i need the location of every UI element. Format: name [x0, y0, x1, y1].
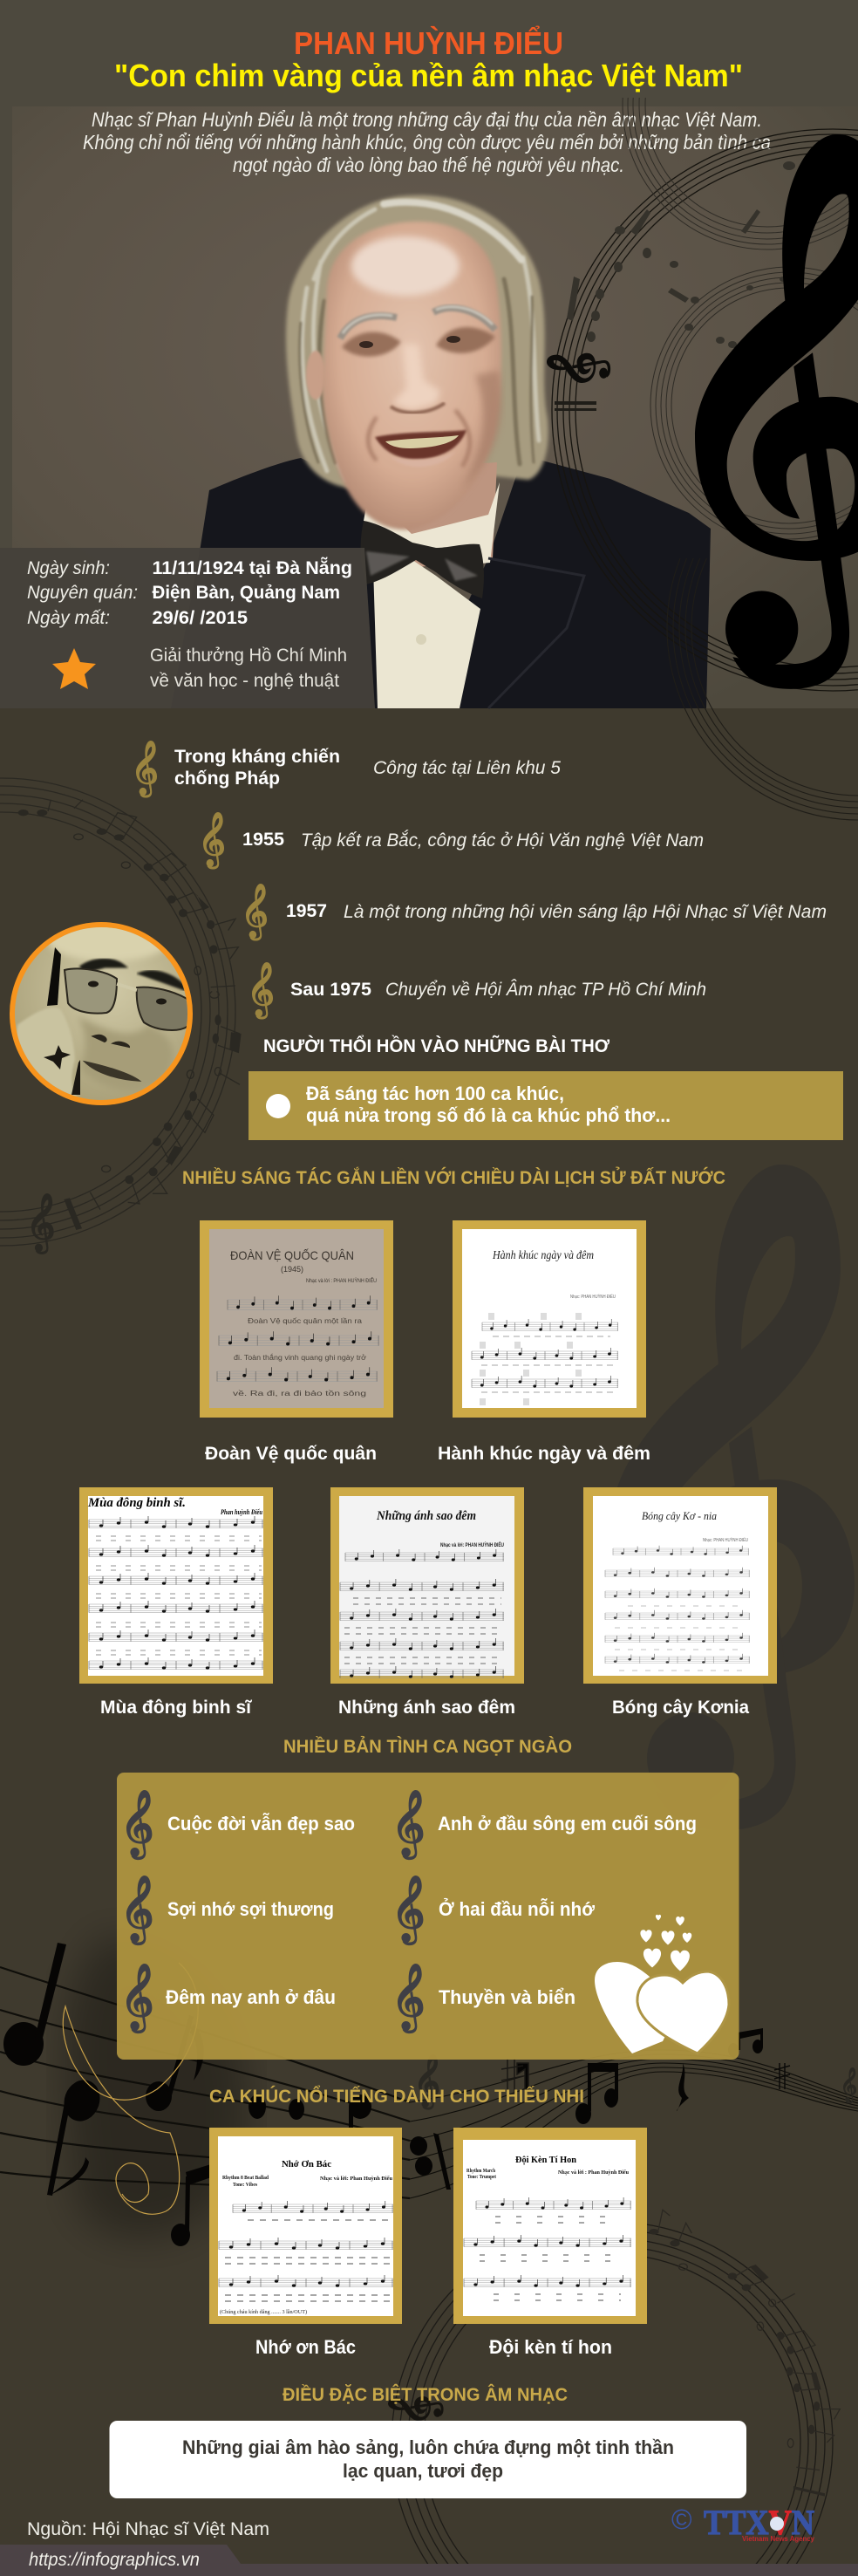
birth row	[27, 557, 352, 578]
description: Tập kết ra Bắc, công tác ở Hội Văn nghệ Việt Nam	[301, 830, 704, 851]
sheet author: Nhạc và lời : PHAN HUỲNH ĐIỂU	[306, 1278, 377, 1284]
lyrics: về. Ra đi, ra đi bảo tồn sông	[233, 1390, 366, 1397]
knuckle creases	[44, 1045, 71, 1069]
left brow	[81, 960, 125, 972]
label: Những ánh sao đêm: Những ánh sao đêm	[338, 1698, 515, 1718]
wavy music staff	[0, 1967, 858, 2198]
teeth	[385, 435, 459, 448]
hometown row	[27, 583, 340, 603]
card frame	[209, 2128, 402, 2324]
icon: clef row 2 left	[126, 1876, 152, 1945]
intro paragraph	[83, 108, 771, 176]
song: Thuyền và biển: Thuyền và biển	[439, 1986, 575, 2008]
label: Đội kèn tí hon: Đội kèn tí hon	[489, 2336, 612, 2358]
icon: clef row 3 left	[126, 1964, 152, 2033]
decorative stave ring bottom right	[392, 2222, 833, 2576]
shirt button	[416, 634, 426, 645]
card frame	[453, 2128, 647, 2324]
label: Bóng cây Kơnia: Bóng cây Kơnia	[612, 1698, 749, 1718]
sheet paper	[593, 1496, 768, 1676]
panel background	[0, 548, 375, 708]
sheet title: Đội Kèn Tí Hon	[515, 2155, 576, 2165]
sheet paper	[218, 2136, 393, 2316]
portrait photograph	[171, 195, 711, 708]
orange ring	[10, 922, 193, 1105]
card frame	[583, 1487, 777, 1684]
sheet rhythm	[222, 2176, 393, 2188]
panel text	[306, 1083, 671, 1126]
sheet rhythm: Rhythm 8 Beat Ballad	[222, 2176, 269, 2181]
timeline item: after 1975	[252, 962, 706, 1019]
shirt	[373, 558, 480, 708]
hometown row: Nguyên quán:	[27, 583, 138, 603]
birth row: 11/11/1924 tại Đà Nẵng	[152, 557, 352, 578]
agency mark: TTXVN	[704, 2503, 814, 2542]
right eye	[446, 336, 460, 343]
sheet paper	[462, 1229, 637, 1408]
stave ring notes left	[18, 800, 242, 1230]
heading: poetry: NGƯỜI THỔI HỒN VÀO NHỮNG BÀI THƠ	[263, 1035, 609, 1056]
sheet title: Những ánh sao đêm	[376, 1509, 476, 1523]
forehead light	[47, 927, 163, 961]
period: Trong kháng chiến	[174, 747, 340, 767]
callout text: Những giai âm hào sảng, luôn chứa đựng một tinh thần	[182, 2436, 674, 2458]
sheet title: ĐOÀN VỆ QUỐC QUÂN	[230, 1247, 354, 1262]
mouth	[85, 1062, 140, 1081]
footer strip	[0, 2545, 858, 2576]
award text: Giải thưởng Hồ Chí Minh	[150, 646, 347, 666]
eyes	[88, 981, 99, 987]
sheet title: Hành khúc ngày và đêm	[492, 1249, 594, 1262]
title subtitle: "Con chim vàng của nền âm nhạc Việt Nam"	[114, 58, 743, 93]
eyes	[359, 341, 373, 348]
nose underside	[391, 403, 445, 413]
staves and lyrics	[464, 2197, 631, 2300]
jacket	[171, 455, 711, 708]
intro paragraph: Không chỉ nổi tiếng với những hành khúc, ông còn được yêu mến bởi những bản tình ca	[83, 131, 771, 154]
label: Mùa đông binh sĩ: Mùa đông binh sĩ	[100, 1698, 252, 1718]
sheet title: Bóng cây Kơ - nia	[642, 1509, 717, 1522]
sheet author: Phan huỳnh Điểu	[221, 1508, 262, 1516]
birth row: Ngày sinh:	[27, 558, 110, 578]
decorative music staves on photo	[551, 98, 858, 692]
description: Công tác tại Liên khu 5	[373, 758, 561, 778]
sheet card: Đội kèn tí hon	[453, 2128, 647, 2324]
sheet author: Nhạc: PHAN HUỲNH ĐIỂU	[703, 1537, 748, 1543]
label: Nhớ ơn Bác: Nhớ ơn Bác	[255, 2336, 356, 2358]
song: Đêm nay anh ở đâu: Đêm nay anh ở đâu	[166, 1986, 336, 2008]
callout text: lạc quan, tươi đẹp	[343, 2460, 503, 2482]
sheet author: Nhạc: PHAN HUỲNH ĐIỂU	[570, 1294, 616, 1300]
right lens	[137, 987, 188, 1030]
icon: gold clef	[203, 812, 224, 869]
icon: gold clef	[252, 962, 273, 1019]
bow tie	[361, 521, 484, 598]
icon: star	[52, 648, 96, 689]
award text	[150, 646, 347, 691]
circular portrait	[10, 919, 193, 1105]
left lens	[65, 968, 117, 1014]
icon: gold clef	[246, 884, 267, 940]
icon: clef row 2 right	[398, 1876, 423, 1945]
card frame	[79, 1487, 273, 1684]
sepia photo base	[15, 927, 187, 1100]
label: Hành khúc ngày và đêm: Hành khúc ngày và đêm	[438, 1444, 650, 1464]
icon: clef row 1 left	[126, 1790, 152, 1860]
panel fill	[117, 1773, 739, 2060]
box fill	[110, 2421, 746, 2498]
faint large background clef	[610, 1165, 855, 1830]
icon: clef row 3 right	[398, 1964, 423, 2033]
staves	[217, 1295, 379, 1382]
eye sockets	[342, 327, 495, 357]
lower ring under header	[666, 558, 858, 820]
sheet rhythm: Nhạc và lời : Phan Huỳnh Điểu	[558, 2169, 630, 2176]
gold outline clef	[63, 1963, 198, 2214]
callout text	[182, 2436, 674, 2482]
description: Chuyển về Hội Âm nhạc TP Hồ Chí Minh	[385, 980, 706, 1000]
right brow	[141, 972, 186, 989]
hair	[286, 195, 548, 489]
staves and lyrics	[340, 1549, 504, 1678]
jacket lapel line	[488, 558, 584, 708]
horizontal clef at bottom	[388, 2396, 444, 2421]
lower lip	[391, 452, 455, 467]
collar	[364, 482, 500, 567]
smile lines	[368, 410, 470, 467]
bow tie highlight	[366, 551, 478, 581]
large black treble clef	[695, 134, 858, 689]
heading: special in music: ĐIỀU ĐẶC BIỆT TRONG ÂM NHẠC	[283, 2384, 568, 2405]
panel text: quá nửa trong số đó là ca khúc phổ thơ...	[306, 1104, 671, 1126]
agency tagline: Vietnam News Agency	[742, 2535, 815, 2543]
neck	[366, 462, 497, 567]
death row: 29/6/ /2015	[152, 608, 248, 628]
icon: clef row 1 right	[398, 1790, 423, 1860]
timeline item: 1955	[203, 812, 704, 869]
black music notes	[3, 1943, 790, 2246]
hometown row: Điện Bàn, Quảng Nam	[152, 583, 340, 603]
card frame	[200, 1220, 393, 1418]
description: Là một trong những hội viên sáng lập Hội Nhạc sĩ Việt Nam	[344, 902, 827, 922]
decorative stave ring left	[0, 778, 235, 1246]
small horizontal clef	[547, 353, 610, 383]
sheet author: Nhạc và lời: PHAN HUỲNH ĐIỂU	[440, 1542, 504, 1548]
stave ring notes bottom right	[649, 2210, 840, 2497]
sheet card: Hành khúc ngày và đêm	[453, 1220, 646, 1418]
bullet dot	[266, 1094, 290, 1118]
wavy staff shadow	[65, 1937, 249, 2238]
heading: history songs: NHIỀU SÁNG TÁC GẮN LIỀN VỚI CHIỀU DÀI LỊCH SỬ ĐẤT NƯỚC	[182, 1167, 725, 1188]
label: Đoàn Vệ quốc quân: Đoàn Vệ quốc quân	[205, 1444, 377, 1464]
panel fill	[249, 1071, 843, 1140]
sheet paper	[339, 1496, 514, 1676]
sheet rhythm: Tone: Trumpet	[467, 2175, 496, 2180]
sheet paper	[209, 1229, 384, 1408]
hand	[13, 1008, 78, 1099]
lyrics	[233, 1317, 367, 1397]
glasses bridge	[117, 984, 137, 990]
ear	[306, 351, 325, 400]
small clef on left stave	[31, 1193, 54, 1254]
card frame	[330, 1487, 524, 1684]
staves and lyrics	[605, 1546, 750, 1671]
source line: Nguồn: Hội Nhạc sĩ Việt Nam	[27, 2519, 269, 2539]
sheet card: Bóng cây Kơnia	[583, 1487, 777, 1684]
year: Sau 1975	[290, 980, 371, 1000]
sheet paper	[463, 2140, 636, 2316]
death row	[27, 608, 248, 628]
year: 1955	[242, 830, 284, 850]
intro paragraph: ngọt ngào đi vào lòng bao thế hệ người yêu nhạc.	[233, 154, 624, 176]
personal info panel	[0, 548, 375, 708]
panel text: Đã sáng tác hơn 100 ca khúc,	[306, 1083, 564, 1104]
panel: love songs	[117, 1773, 739, 2060]
sheet rhythm	[466, 2169, 630, 2180]
callout box	[110, 2421, 746, 2498]
lyrics: Đoàn Vệ quốc quân một lần ra	[248, 1317, 363, 1325]
sheet rhythm: Tone: Vibes	[233, 2183, 258, 2188]
year: 1957	[286, 901, 327, 921]
copyright ring: ©	[671, 2504, 692, 2535]
globe	[770, 2517, 784, 2531]
sheet card: Nhớ ơn Bác	[209, 2128, 402, 2324]
header background band	[0, 0, 858, 708]
nostril shade	[93, 1035, 129, 1047]
song: Cuộc đời vẫn đẹp sao: Cuộc đời vẫn đẹp sao	[167, 1813, 355, 1835]
sheet rhythm: Rhythm March	[466, 2169, 496, 2174]
sheet title: Nhớ Ơn Bác	[282, 2159, 331, 2169]
small clefs on staff	[419, 2054, 856, 2110]
heading: love songs: NHIỀU BẢN TÌNH CA NGỌT NGÀO	[283, 1737, 572, 1757]
logo: TTXVN	[671, 2503, 815, 2543]
mouth	[375, 430, 466, 459]
song: Anh ở đầu sông em cuối sông: Anh ở đầu sông em cuối sông	[438, 1813, 697, 1835]
portrait photo background	[12, 106, 858, 708]
icon: gold clef	[136, 741, 157, 797]
hair strands	[300, 202, 539, 480]
panel: songs count	[249, 1071, 843, 1140]
sheet year: (1945)	[281, 1265, 303, 1274]
timeline item: resistance war	[136, 741, 561, 797]
staves and lyrics	[472, 1313, 618, 1405]
song: Ở hai đầu nỗi nhớ: Ở hai đầu nỗi nhớ	[439, 1898, 595, 1920]
forehead highlight	[351, 236, 460, 296]
sheet title: Mùa đông binh sĩ.	[87, 1496, 186, 1510]
cheek shade	[462, 371, 501, 489]
lyrics: đi. Toàn thắng vinh quang ghi ngày trở	[234, 1354, 367, 1362]
cheek shading	[77, 1016, 174, 1090]
face	[323, 222, 501, 530]
staves and lyrics	[89, 1516, 263, 1670]
song: Sợi nhớ sợi thương: Sợi nhớ sợi thương	[167, 1898, 334, 1920]
hand shadow	[72, 1060, 80, 1095]
pen	[47, 947, 61, 1006]
sheet rhythm: Nhạc và lời: Phan Huỳnh Điểu	[320, 2176, 393, 2182]
icon: hearts	[595, 1915, 729, 2053]
sheet card: Đoàn Vệ quốc quân	[200, 1220, 393, 1418]
eyebrows	[340, 307, 495, 338]
period: chống Pháp	[174, 769, 280, 789]
right eye	[156, 998, 167, 1005]
sheet card: Những ánh sao đêm	[330, 1487, 524, 1684]
death row: Ngày mất:	[27, 608, 110, 628]
heading: children's songs: CA KHÚC NỔI TIẾNG DÀNH CHO THIẾU NHI	[209, 2086, 584, 2107]
sheet paper	[88, 1496, 263, 1676]
nose bridge light	[392, 345, 440, 410]
website url: https://infographics.vn	[29, 2550, 200, 2570]
sheet footer: (Chúng cháu kính dâng ....... 3 lần/OUT)	[220, 2309, 307, 2315]
timeline item: 1957	[246, 884, 827, 940]
award text: về văn học - nghệ thuật	[150, 671, 339, 691]
title name: PHAN HUỲNH ĐIỂU	[294, 24, 563, 61]
sheet card: Mùa đông binh sĩ	[79, 1487, 273, 1684]
period	[174, 747, 340, 789]
intro paragraph: Nhạc sĩ Phan Huỳnh Điểu là một trong những cây đại thụ của nền âm nhạc Việt Nam.	[92, 108, 762, 131]
card frame	[453, 1220, 646, 1418]
staves and lyrics	[219, 2201, 393, 2301]
